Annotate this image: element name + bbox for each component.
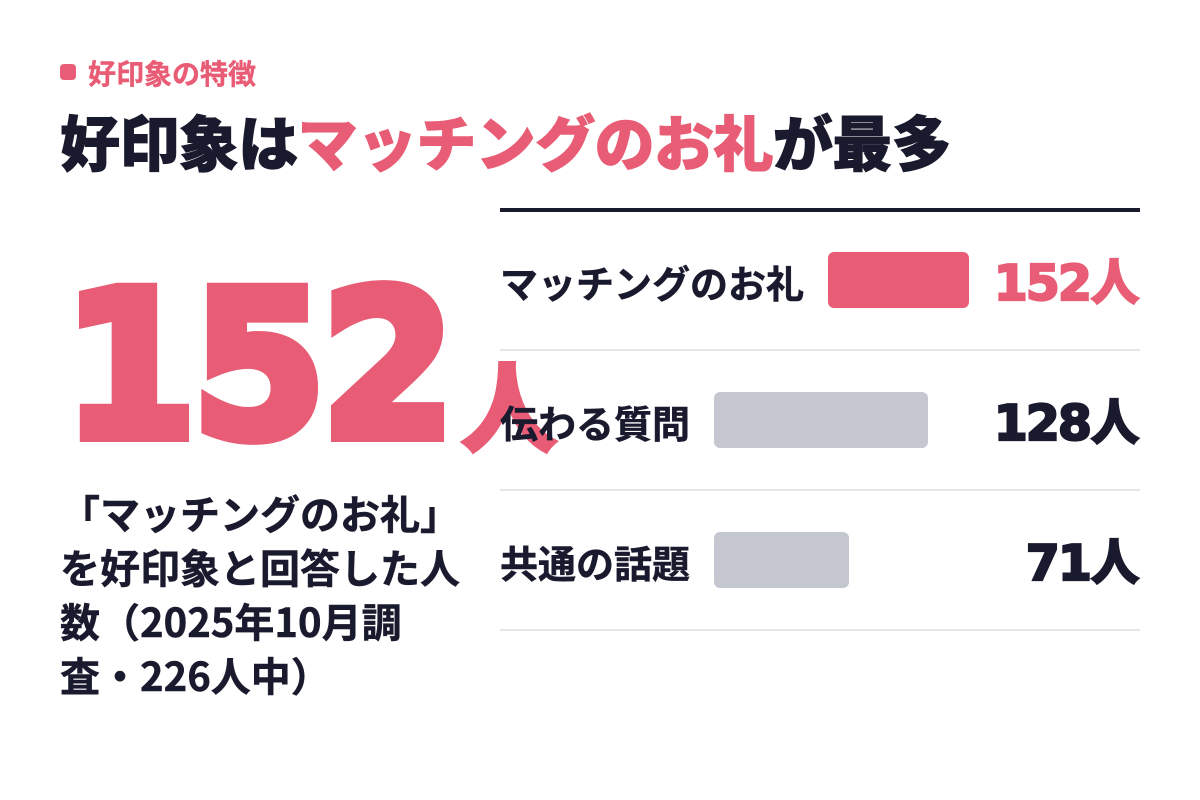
row divider [500, 349, 1140, 351]
row divider [500, 489, 1140, 491]
value: 71人 [1026, 523, 1140, 595]
description: 数（2025年10月調 [60, 591, 402, 649]
description: 査・226人中） [60, 645, 331, 703]
row label: 共通の話題 [500, 534, 690, 589]
kicker text: 好印象の特徴 [88, 53, 256, 93]
row: マッチングのお礼 [500, 243, 1140, 351]
row divider [500, 629, 1140, 631]
big digits: 152 [63, 248, 451, 484]
ranking top rule [500, 208, 1140, 212]
icon: kicker square [60, 64, 76, 80]
description [60, 483, 460, 703]
row: 共通の話題 [500, 523, 1140, 631]
bar [714, 532, 849, 588]
title: 好印象はマッチングのお礼が最多 [60, 97, 951, 184]
value: 152人 [994, 243, 1140, 315]
row label: 伝わる質問 [500, 394, 690, 449]
description: 「マッチングのお礼」 [60, 483, 460, 541]
big number: 152人 [63, 248, 559, 484]
big unit: 人 [459, 329, 559, 474]
bar [714, 392, 928, 448]
row: 伝わる質問 [500, 383, 1140, 491]
description: を好印象と回答した人 [60, 537, 460, 595]
row label: マッチングのお礼 [500, 254, 804, 309]
bar [828, 252, 969, 308]
kicker [60, 53, 256, 93]
value: 128人 [994, 383, 1140, 455]
